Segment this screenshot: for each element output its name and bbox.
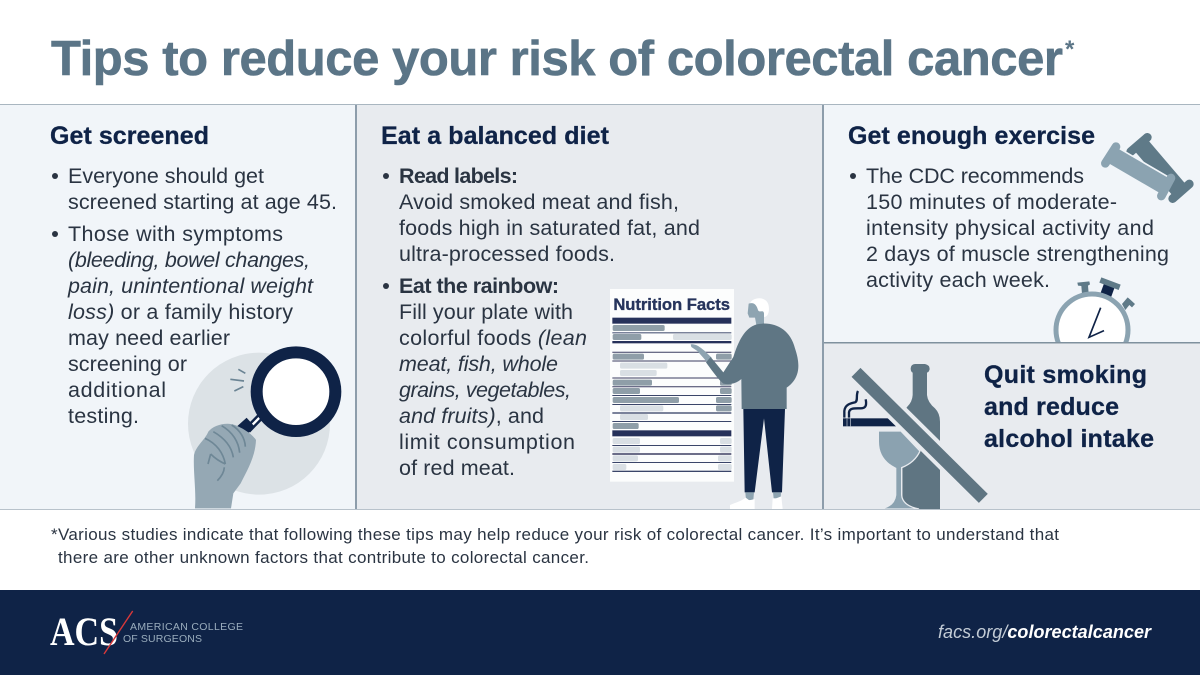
text block: screening bullets xyxy=(52,164,337,428)
icon: no smoking or alcohol xyxy=(843,364,983,509)
text: quit smoking and reduce alcohol intake: and reduce xyxy=(984,393,1119,421)
icon: hand with magnifying glass xyxy=(188,352,335,508)
text block: exercise bullet: intensity physical activity and xyxy=(866,216,1154,240)
text block: diet bullets xyxy=(383,164,700,480)
text block: screening bullets: screened starting at age 45. xyxy=(68,190,337,214)
panel: eat a balanced diet xyxy=(357,105,823,509)
text block: diet bullets: limit consumption xyxy=(399,430,575,454)
text block: exercise bullet: The CDC recommends xyxy=(866,164,1084,188)
text block: diet bullets: and fruits), and xyxy=(399,404,544,428)
panel: get screened xyxy=(0,105,356,509)
text block: exercise bullet: 150 minutes of moderate- xyxy=(866,190,1117,214)
text block: diet bullets: foods high in saturated fat, and xyxy=(399,216,700,240)
illustration: nutrition label and person xyxy=(610,289,798,509)
text block: exercise bullet: activity each week. xyxy=(866,268,1050,292)
text block: diet bullets: of red meat. xyxy=(399,456,515,480)
footnote xyxy=(51,525,1059,567)
text block: diet bullets: meat, fish, whole xyxy=(399,352,558,376)
title: Tips to reduce your risk of colorectal cancer xyxy=(51,32,1063,86)
person xyxy=(691,298,798,509)
text block: diet bullets: Fill your plate with xyxy=(399,300,573,324)
text block: exercise bullet: 2 days of muscle strengthening xyxy=(866,242,1169,266)
footnote: there are other unknown factors that contribute to colorectal cancer. xyxy=(58,548,589,567)
text block: diet bullets: Avoid smoked meat and fish, xyxy=(399,190,679,214)
logo: American College of Surgeons: AMERICAN COLLEGE xyxy=(130,621,243,633)
text block: diet bullets: ultra-processed foods. xyxy=(399,242,615,266)
text block: diet bullets: grains, vegetables, xyxy=(399,378,571,402)
text block: screening bullets: testing. xyxy=(68,404,139,428)
text block: screening bullets: pain, unintentional weight xyxy=(67,274,314,298)
text: quit smoking and reduce alcohol intake: alcohol intake xyxy=(984,425,1154,453)
text block: diet bullets: Read labels: xyxy=(399,164,518,188)
text: quit smoking and reduce alcohol intake xyxy=(984,361,1154,453)
icon: stopwatch xyxy=(1056,277,1135,366)
text: quit smoking and reduce alcohol intake: Quit smoking xyxy=(984,361,1147,389)
logo: American College of Surgeons: OF SURGEONS xyxy=(123,633,202,645)
footnote: *Various studies indicate that following these tips may help reduce your risk of colorectal cancer. It’s important to understand that xyxy=(51,525,1059,544)
illustration: nutrition label and person: Nutrition Facts xyxy=(613,295,730,314)
heading: get screened: Get screened xyxy=(50,122,209,150)
logo: American College of Surgeons xyxy=(50,609,243,654)
text block: diet bullets: colorful foods (lean xyxy=(399,326,587,350)
url: facs.org/colorectalcancer xyxy=(938,622,1152,642)
heading: eat a balanced diet: Eat a balanced diet xyxy=(381,122,610,150)
text block: screening bullets: additional xyxy=(68,378,166,402)
title: * xyxy=(1065,36,1075,63)
text block: screening bullets: Everyone should get xyxy=(68,164,264,188)
icon: dumbbells xyxy=(1105,137,1189,199)
text block: screening bullets: (bleeding, bowel changes, xyxy=(68,248,310,272)
text block: screening bullets: Those with symptoms xyxy=(68,222,283,246)
panel: get enough exercise xyxy=(824,105,1200,366)
text block: diet bullets: Eat the rainbow: xyxy=(399,274,559,298)
text block: exercise bullet xyxy=(850,164,1169,292)
text block: screening bullets: may need earlier xyxy=(68,326,230,350)
heading: get enough exercise: Get enough exercise xyxy=(848,122,1095,150)
footer band xyxy=(0,590,1200,675)
text block: screening bullets: screening or xyxy=(68,352,187,376)
logo: American College of Surgeons: ACS xyxy=(50,609,118,654)
panel: quit smoking and reduce alcohol xyxy=(824,342,1200,509)
text block: screening bullets: loss) or a family history xyxy=(68,300,293,324)
